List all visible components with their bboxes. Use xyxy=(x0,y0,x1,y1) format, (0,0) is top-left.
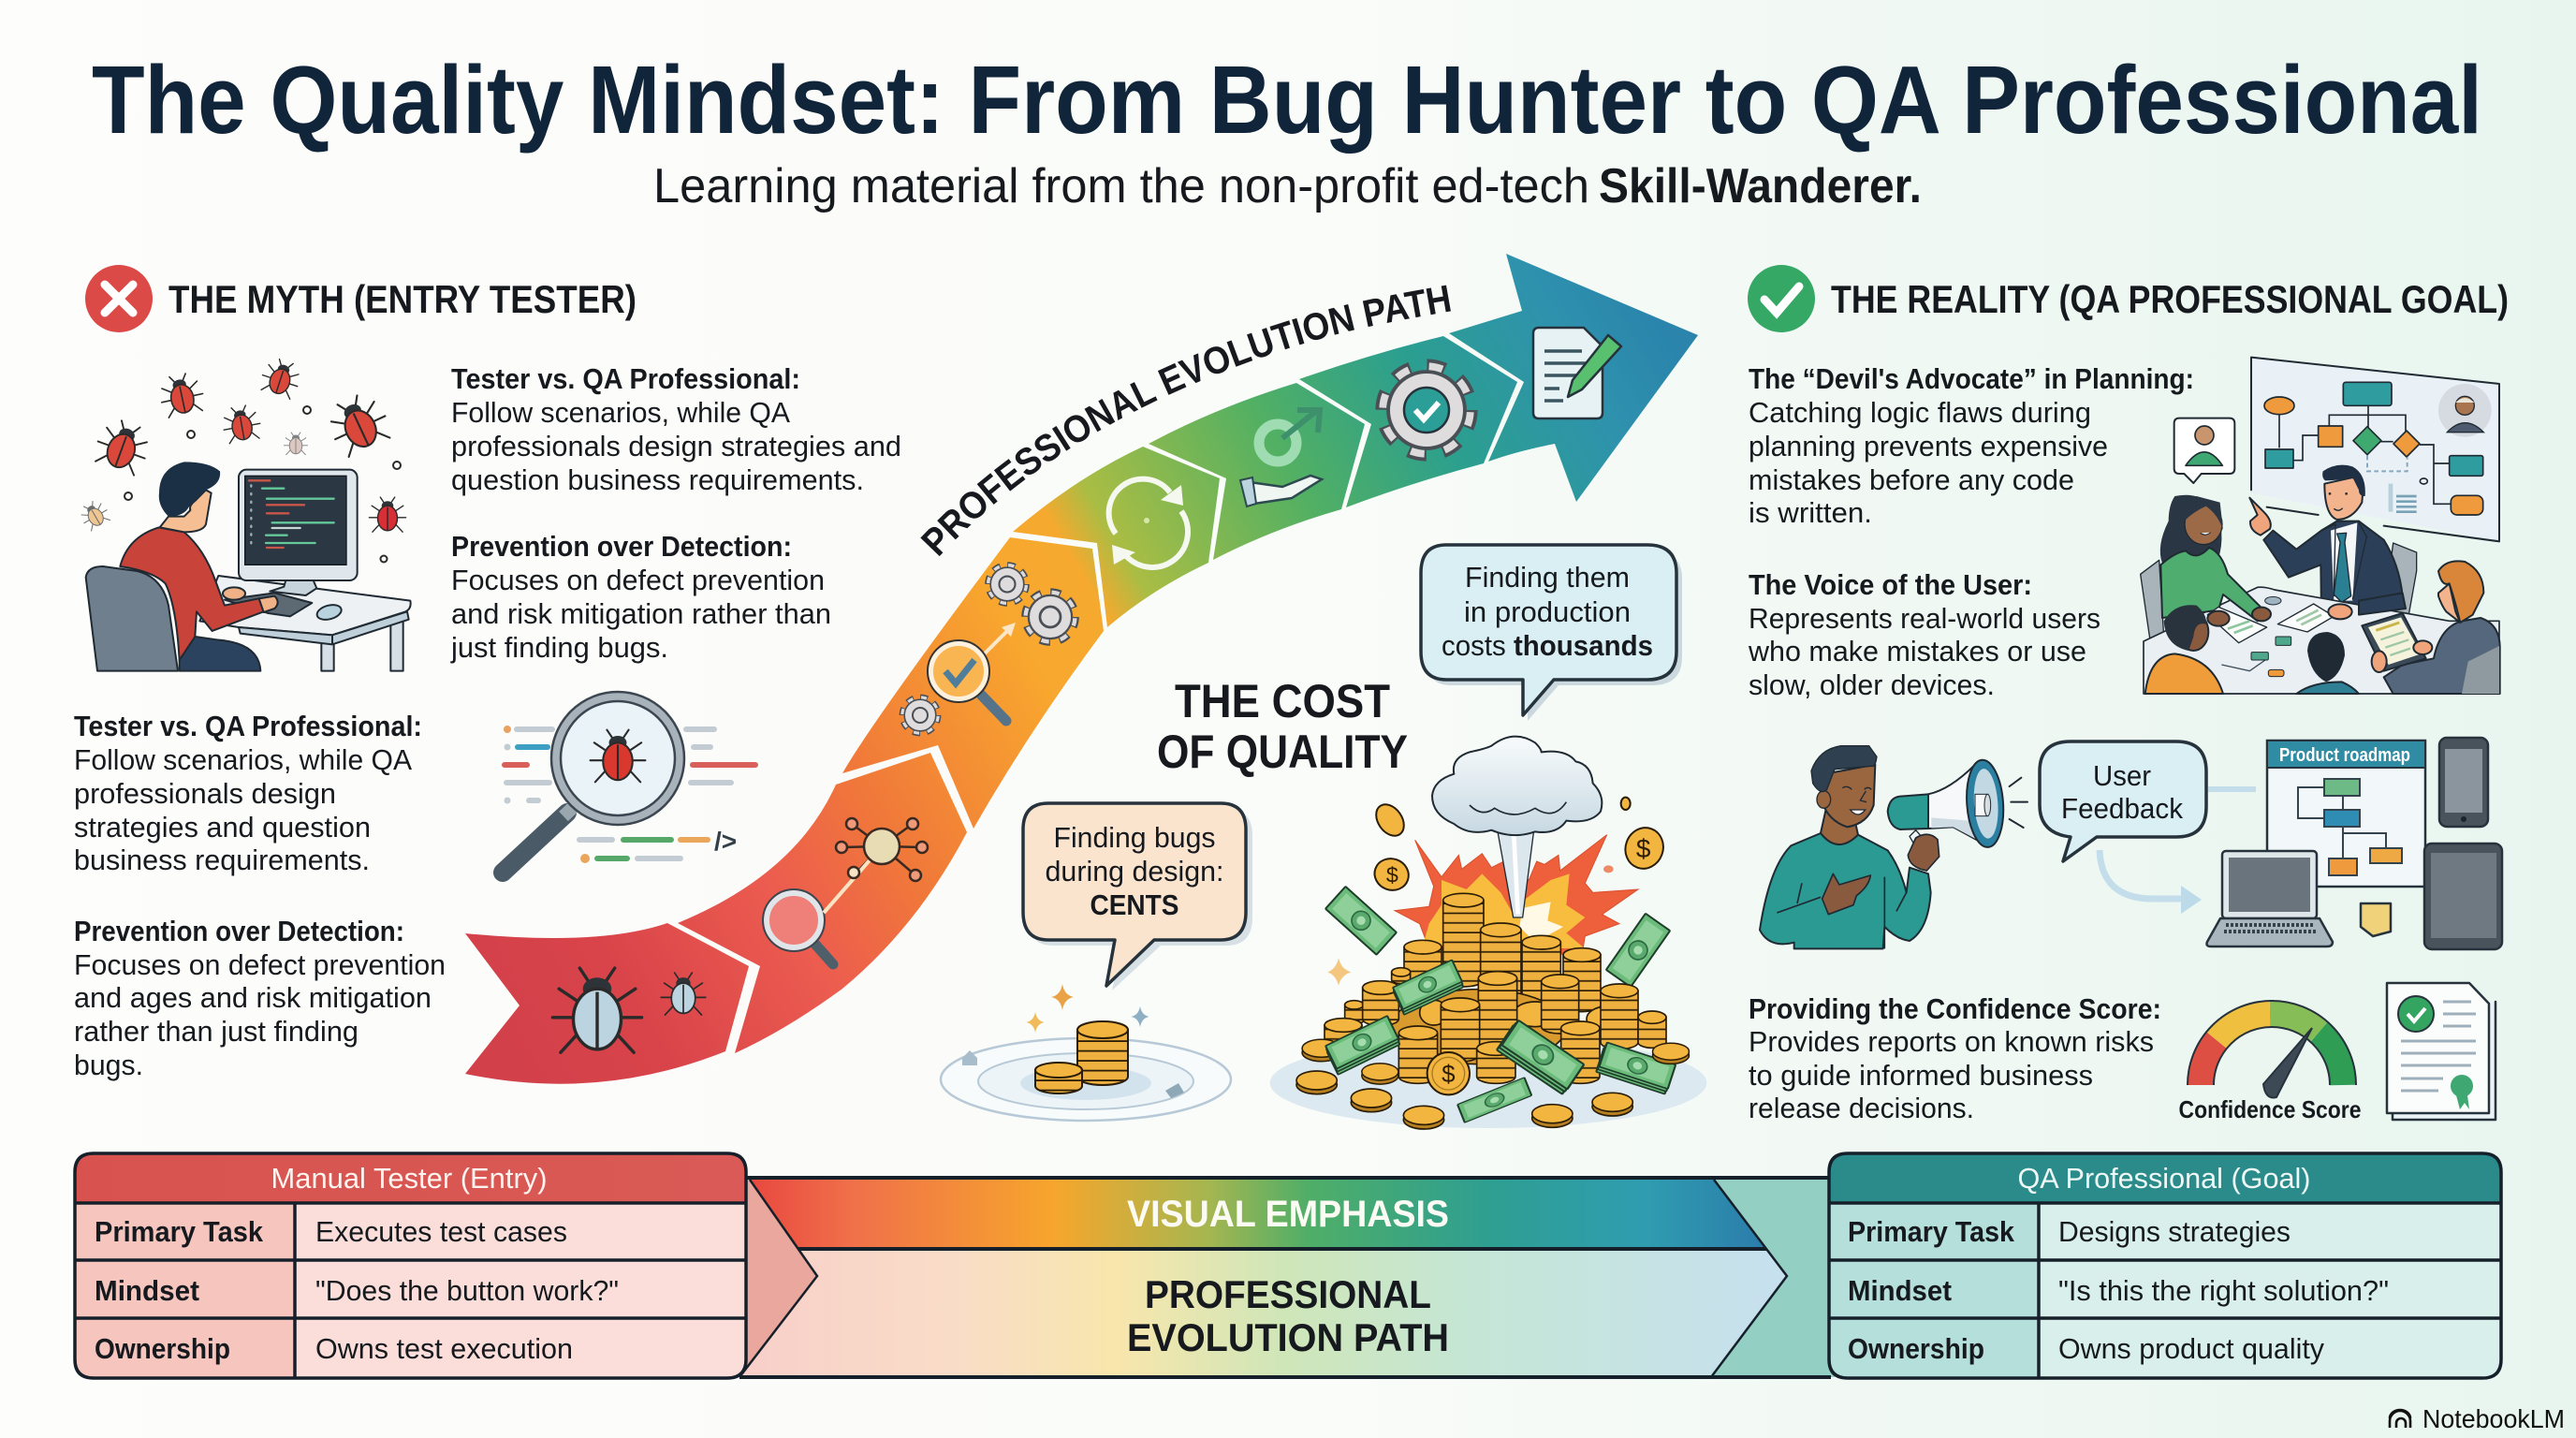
notebooklm logo: NotebookLM xyxy=(2422,1404,2565,1433)
illustration: product roadmap on devices: Product roadmap xyxy=(2279,745,2410,766)
row: ownership xyxy=(95,1332,573,1365)
ribbon stage 1 xyxy=(465,923,749,1084)
illustration: tester at computer swarmed by bugs xyxy=(77,356,411,671)
illustration: person with megaphone xyxy=(1760,746,2027,948)
table: qa professional xyxy=(1829,1153,2501,1378)
heading: the myth: THE MYTH (ENTRY TESTER) xyxy=(168,277,637,321)
ribbon stage 3 xyxy=(842,537,1104,829)
text block: prevention over detection second xyxy=(74,915,446,1081)
illustration: magnifier over code with bug: /> xyxy=(714,827,737,856)
comparison strip xyxy=(75,1153,2501,1378)
callout: production costs thousands: costs thousands xyxy=(1442,629,1653,662)
callout: design costs cents: during design: xyxy=(1045,855,1224,888)
row: primary task: Primary Task xyxy=(95,1215,264,1248)
row: mindset: "Is this the right solution?" xyxy=(2058,1274,2389,1307)
row: primary task xyxy=(95,1215,567,1248)
text block: devil's advocate xyxy=(1749,362,2194,529)
text block: tester vs qa xyxy=(451,362,901,496)
illustration: product roadmap on devices xyxy=(2207,738,2502,949)
callout: design costs cents xyxy=(1023,803,1252,990)
gauge: confidence score: Confidence Score xyxy=(2179,1095,2361,1123)
text block: voice of the user xyxy=(1748,568,2100,701)
illustration: small coin stack in puddle xyxy=(941,984,1231,1121)
chevron: right connector xyxy=(1711,1178,1835,1377)
row: mindset xyxy=(95,1274,619,1307)
row: ownership: Ownership xyxy=(95,1332,230,1365)
text block: tester vs qa second: professionals design xyxy=(74,777,336,810)
text block: prevention over detection: and risk mitigation rather than xyxy=(451,597,831,630)
text block: tester vs qa second: strategies and question xyxy=(74,811,371,844)
text block: devil's advocate: planning prevents expensive xyxy=(1749,430,2108,462)
avatar callout xyxy=(2174,418,2234,483)
illustration: explosion of money: $ xyxy=(1636,834,1651,863)
icon: hand with growth arrow xyxy=(1240,410,1322,506)
text block: devil's advocate: is written. xyxy=(1749,496,1872,529)
subtitle: Learning material from the non-profit ed-tech xyxy=(653,159,1589,213)
icon: small magnifier xyxy=(763,889,833,964)
table: manual tester xyxy=(75,1153,746,1378)
callout: user feedback: User xyxy=(2093,759,2151,792)
icon: document and pencil xyxy=(1533,328,1621,418)
text block: tester vs qa: professionals design strategies and xyxy=(451,430,901,462)
icon: red cross xyxy=(85,265,153,332)
text block: confidence score: release decisions. xyxy=(1749,1092,1974,1124)
illustration: explosion of money: $ xyxy=(1442,1060,1456,1088)
text block: confidence score: Provides reports on known risks xyxy=(1749,1025,2154,1058)
icon: network node xyxy=(824,818,928,913)
ribbon label: PROFESSIONAL EVOLUTION PATH xyxy=(920,285,1451,556)
banner: visual emphasis xyxy=(750,1178,1766,1248)
heading: cost of quality: THE COST xyxy=(1175,675,1390,727)
tablet xyxy=(2424,844,2502,949)
row: primary task: Designs strategies xyxy=(2058,1215,2291,1248)
row: ownership: Owns product quality xyxy=(2058,1332,2324,1365)
icon: large bug xyxy=(552,968,642,1052)
text block: prevention over detection second: Focuses on defect prevention xyxy=(74,948,446,981)
heading: cost of quality xyxy=(1157,675,1408,778)
text block: tester vs qa second xyxy=(74,710,422,876)
subtitle: Skill-Wanderer. xyxy=(1599,159,1922,213)
text block: prevention over detection: just finding bugs. xyxy=(450,631,668,664)
heading: cost of quality: OF QUALITY xyxy=(1157,726,1408,778)
row: ownership: Owns test execution xyxy=(315,1332,573,1365)
callout: user feedback: Feedback xyxy=(2061,792,2183,825)
ribbon stage 4 xyxy=(1013,447,1220,627)
explosion cloud xyxy=(1432,737,1602,835)
panel: the myth xyxy=(74,265,901,1081)
banner: professional evolution path xyxy=(739,1251,1787,1377)
ribbon arrow head xyxy=(1449,254,1698,502)
row: ownership: Ownership xyxy=(1848,1332,1984,1365)
gauge: confidence score xyxy=(2179,1001,2361,1123)
ribbon stage 5 xyxy=(1149,383,1365,560)
row: mindset: "Does the button work?" xyxy=(315,1274,619,1307)
callout: design costs cents: CENTS xyxy=(1090,888,1179,921)
row: mindset xyxy=(1848,1274,2389,1307)
text block: confidence score: Providing the Confidence Score: xyxy=(1749,992,2161,1025)
text block: voice of the user: Represents real-world users xyxy=(1749,602,2100,635)
banner: professional evolution path: PROFESSIONAL xyxy=(1145,1272,1431,1316)
callout: production costs thousands: Finding them xyxy=(1465,561,1630,594)
icon: gear with check xyxy=(1388,372,1465,448)
row: ownership xyxy=(1848,1332,2324,1365)
text block: prevention over detection xyxy=(450,530,831,664)
callout: production costs thousands: in production xyxy=(1464,595,1631,628)
text block: confidence score xyxy=(1749,992,2161,1124)
row: mindset: Mindset xyxy=(1848,1274,1952,1307)
professional evolution path ribbon xyxy=(465,254,1698,1084)
panel: the reality xyxy=(1748,265,2509,1124)
sticky note xyxy=(2361,903,2391,936)
icon: green check xyxy=(1748,265,1815,332)
illustration: magnifier over code with bug xyxy=(503,692,755,873)
icon: gears and magnifier xyxy=(904,567,1072,731)
row: primary task: Executes test cases xyxy=(315,1215,567,1248)
text block: tester vs qa: question business requirements. xyxy=(451,463,864,496)
text block: voice of the user: slow, older devices. xyxy=(1749,668,1995,701)
text block: tester vs qa: Tester vs. QA Professional: xyxy=(451,362,800,395)
ribbon stage 6 xyxy=(1299,336,1517,507)
illustration: explosion of money xyxy=(1270,737,1706,1129)
header: Manual Tester (Entry) xyxy=(271,1162,547,1195)
text block: devil's advocate: mistakes before any code xyxy=(1749,463,2074,496)
illustration: explosion of money: $ xyxy=(1386,863,1398,888)
text block: prevention over detection second: and ages and risk mitigation xyxy=(74,981,432,1014)
callout: design costs cents: Finding bugs xyxy=(1054,821,1215,854)
panel: cost of quality xyxy=(941,545,1706,1129)
text block: voice of the user: The Voice of the User: xyxy=(1749,568,2032,601)
icon: report document xyxy=(2387,983,2496,1120)
row: primary task: Primary Task xyxy=(1848,1215,2015,1248)
text block: devil's advocate: Catching logic flaws during xyxy=(1749,396,2091,429)
text block: prevention over detection second: Prevention over Detection: xyxy=(74,915,404,947)
text block: devil's advocate: The “Devil's Advocate” in Planning: xyxy=(1749,362,2194,395)
icon: cycle arrows xyxy=(1109,479,1188,567)
callout: user feedback xyxy=(2040,741,2256,914)
text block: tester vs qa second: Follow scenarios, while QA xyxy=(74,743,412,776)
text block: prevention over detection second: bugs. xyxy=(74,1049,143,1081)
banner: visual emphasis: VISUAL EMPHASIS xyxy=(1127,1194,1449,1235)
text block: voice of the user: who make mistakes or use xyxy=(1748,635,2086,668)
phone xyxy=(2439,738,2488,827)
header: QA Professional (Goal) xyxy=(2018,1162,2310,1195)
row: mindset: Mindset xyxy=(95,1274,199,1307)
icon: small bug xyxy=(661,973,706,1015)
text block: tester vs qa: Follow scenarios, while QA xyxy=(451,396,790,429)
text block: prevention over detection: Focuses on defect prevention xyxy=(451,564,825,596)
text block: tester vs qa second: Tester vs. QA Professional: xyxy=(74,710,422,742)
callout: production costs thousands xyxy=(1421,545,1682,721)
text block: prevention over detection second: rather than just finding xyxy=(74,1015,359,1048)
chevron: left connector xyxy=(739,1178,817,1377)
text block: tester vs qa second: business requirements. xyxy=(74,844,370,876)
text block: confidence score: to guide informed business xyxy=(1749,1059,2093,1092)
row: primary task xyxy=(1848,1215,2291,1248)
banner: professional evolution path: EVOLUTION PATH xyxy=(1127,1315,1449,1359)
laptop xyxy=(2207,851,2333,946)
text block: prevention over detection: Prevention over Detection: xyxy=(451,530,792,563)
illustration: planning meeting at whiteboard xyxy=(2141,358,2500,694)
ribbon stage 2 xyxy=(678,753,967,1053)
